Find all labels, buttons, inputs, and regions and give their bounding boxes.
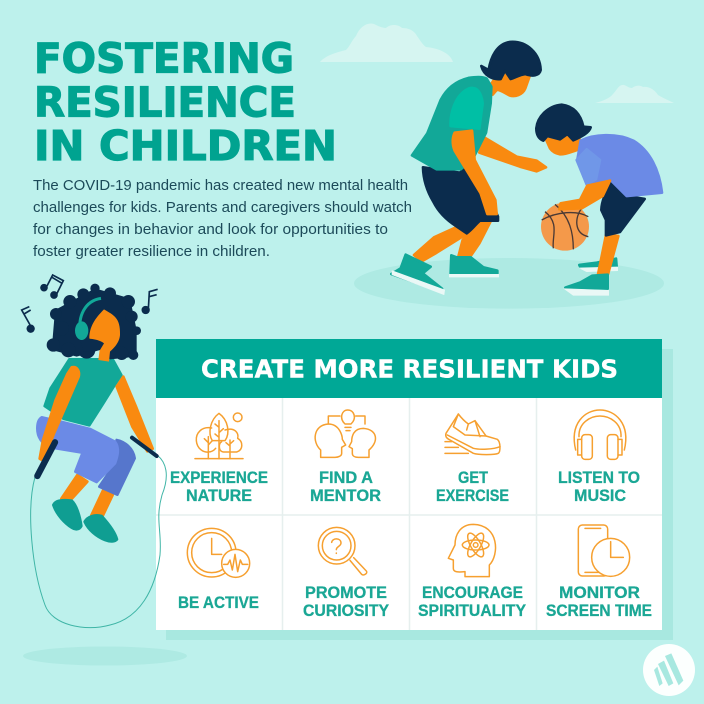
icon: magnifying glass with question mark: [318, 527, 367, 575]
label: [558, 468, 640, 505]
jump rope: [31, 455, 166, 628]
label: CURIOSITY: [303, 601, 390, 620]
icon: phone and clock: [578, 525, 630, 576]
ground shadow: [354, 258, 664, 309]
hair: [47, 284, 141, 360]
item: monitor screen time: [546, 525, 652, 620]
label: NATURE: [186, 486, 252, 505]
label: EXPERIENCE: [170, 468, 268, 487]
panel header: [156, 339, 662, 398]
label: [303, 583, 390, 620]
jump rope handles: [37, 438, 157, 476]
adult figure: [391, 42, 546, 295]
title: FOSTERING: [34, 35, 294, 83]
item: experience nature: [170, 413, 268, 505]
cloud: small: [595, 85, 674, 103]
label: EXERCISE: [436, 486, 509, 505]
intro text: for changes in behavior and look for opportunities to: [33, 221, 388, 238]
label: PROMOTE: [305, 583, 387, 602]
label: ENCOURAGE: [422, 583, 523, 602]
intro text: [33, 177, 412, 260]
label: GET: [458, 468, 489, 487]
item: listen to music: [558, 410, 640, 505]
item: promote curiosity: [303, 527, 390, 620]
icon: trees: [195, 413, 243, 459]
music notes: [22, 275, 158, 332]
panel body: [156, 398, 662, 630]
title: IN CHILDREN: [34, 122, 337, 170]
item: find a mentor: [310, 410, 381, 505]
child figure: [536, 105, 662, 295]
label: [436, 468, 509, 505]
basketball: [541, 203, 589, 251]
intro text: foster greater resilience in children.: [33, 243, 270, 260]
intro text: The COVID-19 pandemic has created new mental health: [33, 177, 408, 194]
label: SCREEN TIME: [546, 601, 652, 620]
label: [418, 583, 527, 620]
title: RESILIENCE: [34, 79, 296, 127]
logo: [643, 644, 695, 696]
intro text: challenges for kids. Parents and caregivers should watch: [33, 199, 412, 216]
illustration: girl jumping rope with headphones: [22, 275, 166, 628]
icon: headphones: [574, 410, 626, 459]
item: encourage spirituality: [418, 524, 527, 620]
item: be active: [178, 528, 259, 612]
label: MUSIC: [574, 486, 626, 505]
cloud: large: [320, 24, 453, 62]
label: SPIRITUALITY: [418, 601, 527, 620]
label: BE ACTIVE: [178, 593, 259, 612]
label: LISTEN TO: [558, 468, 640, 487]
label: [170, 468, 268, 505]
title: [34, 35, 337, 170]
headphones: [75, 298, 101, 340]
label: [546, 583, 652, 620]
icon: clock and pulse: [187, 528, 250, 577]
label: FIND A: [319, 468, 373, 487]
icon: two heads with light bulb: [315, 410, 375, 457]
icon: running shoe: [445, 414, 500, 455]
girl figure: [22, 275, 158, 541]
label: MONITOR: [559, 583, 640, 602]
panel shadow: [166, 349, 673, 640]
panel: create more resilient kids: [156, 339, 673, 640]
label: [310, 468, 381, 505]
label: MENTOR: [310, 486, 381, 505]
icon: head with atom: [448, 524, 496, 577]
item: get exercise: [436, 414, 509, 505]
panel heading: CREATE MORE RESILIENT KIDS: [201, 354, 618, 384]
ground shadow under girl: [23, 646, 187, 666]
illustration: adult and child playing basketball: [354, 42, 664, 309]
